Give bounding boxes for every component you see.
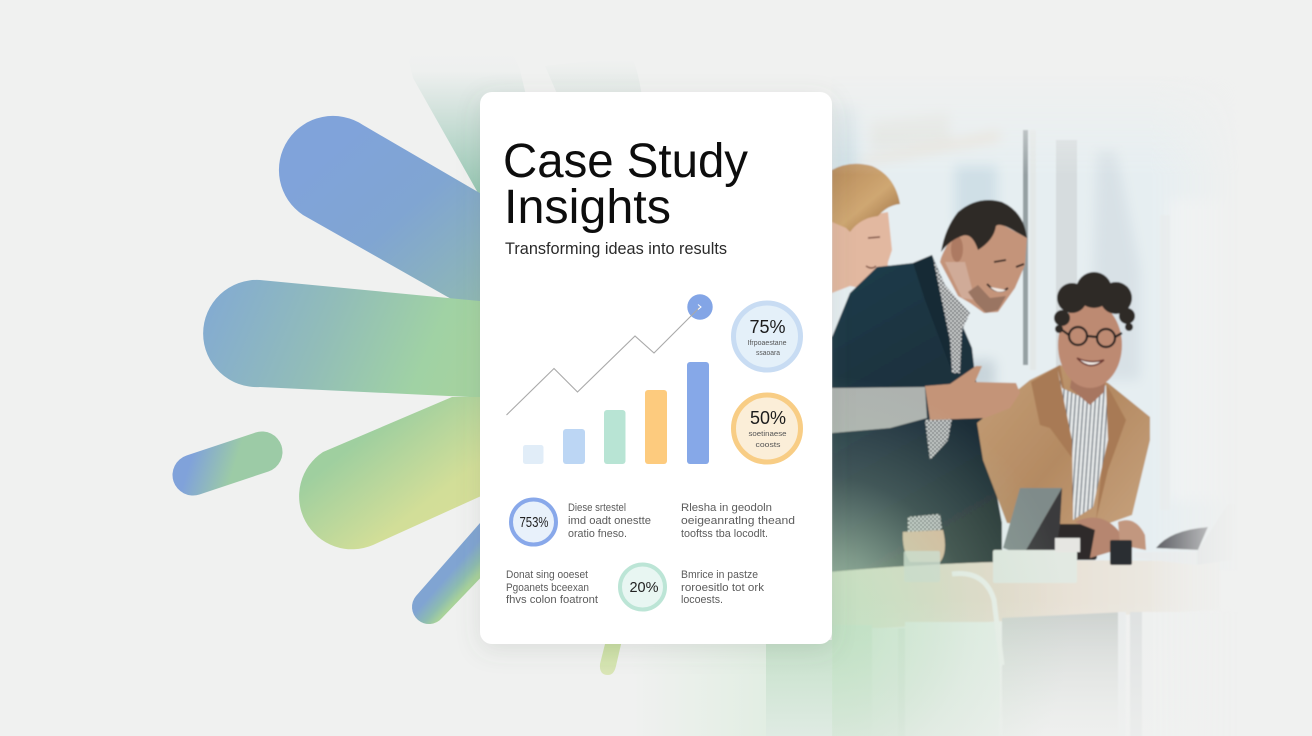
face	[1058, 302, 1122, 388]
text block: bottom left	[506, 569, 598, 606]
chart: rising line and bars	[506, 294, 713, 464]
hair	[941, 200, 1027, 252]
hair	[832, 164, 900, 232]
gesturing hand	[925, 366, 1020, 420]
title: Insights	[504, 181, 671, 234]
text block: bottom right	[681, 569, 765, 606]
subtitle: Transforming ideas into results	[505, 240, 727, 258]
text block: bottom left: fhvs colon foatront	[506, 594, 598, 606]
petal: small capsule	[193, 452, 262, 475]
text block: bottom right: roroesitlo tot ork	[681, 582, 765, 594]
smile	[1077, 358, 1104, 366]
petal: lime	[299, 397, 490, 549]
laptop lid	[1197, 504, 1236, 565]
pale trouser shape below the card	[766, 640, 832, 736]
stat: 50%: soetinaese	[748, 431, 787, 438]
stat: 75%: Ifrpoaestane	[748, 340, 787, 347]
table legs and lower area	[832, 612, 1242, 736]
stat: 50%: coosts	[756, 442, 781, 449]
striped shirt	[1057, 367, 1108, 520]
bars	[523, 362, 709, 464]
tablet shadow	[1023, 488, 1062, 555]
person: left man	[832, 164, 900, 293]
title	[503, 135, 748, 234]
title: Case Study	[503, 135, 748, 188]
laptop base	[1134, 552, 1197, 565]
fist and cuff	[903, 514, 945, 562]
white box	[993, 550, 1077, 583]
jacket lapel	[913, 256, 950, 354]
petal: faint top	[545, 56, 642, 96]
text block: top right: Rlesha in geodoln	[681, 502, 772, 514]
petal: pale top	[409, 46, 560, 240]
card background	[480, 92, 832, 644]
text block: top middle	[568, 502, 651, 540]
text block: top middle: imd oadt onestte	[568, 515, 651, 527]
petal: bottom tip	[600, 640, 622, 675]
marker chevron	[698, 304, 701, 310]
small white block	[1055, 538, 1080, 552]
glass	[904, 551, 940, 582]
window background	[832, 157, 1204, 560]
person: middle man	[832, 200, 1027, 572]
petal: thin lower	[412, 515, 490, 624]
text block: bottom right: locoests.	[681, 594, 723, 606]
green fade over lower left of photo	[832, 375, 1072, 736]
ear	[951, 236, 963, 262]
eye and mouth	[866, 237, 880, 268]
glasses	[1062, 327, 1122, 347]
white fade over lower photo	[832, 600, 1262, 736]
face	[832, 212, 892, 293]
stubble	[968, 285, 1006, 313]
eyes and smile	[987, 260, 1024, 291]
blazer lapel right	[1096, 385, 1126, 520]
stat: 75%: ssaoara	[756, 350, 780, 357]
checked shirt upper	[933, 258, 970, 373]
fan graphic	[193, 46, 642, 675]
pale floor below the card	[630, 620, 766, 736]
blazer lapel left	[1031, 366, 1072, 456]
trend line	[506, 307, 700, 415]
jacket	[832, 255, 1002, 572]
small dark cup	[1110, 540, 1132, 565]
neck	[1070, 380, 1105, 406]
text block: top right	[681, 502, 795, 540]
laptop keyboard	[1156, 527, 1208, 550]
mug	[1057, 524, 1097, 560]
neck highlight	[945, 262, 975, 300]
stat: 753%	[511, 500, 556, 544]
stat: 20%: 20%	[630, 579, 658, 596]
stat: 50%	[734, 395, 800, 462]
text block: top right: tooftss tba locodlt.	[681, 528, 768, 540]
stat: 50%: 50%	[750, 408, 786, 428]
cable	[952, 574, 1002, 665]
stat: 75%: 75%	[749, 317, 786, 337]
blurred window details	[832, 114, 1139, 383]
petal: teal green	[203, 280, 490, 398]
stat: 753%: 753%	[520, 514, 548, 531]
text block: top right: oeigeanratlng theand	[681, 515, 795, 527]
text block: bottom right: Bmrice in pastze	[681, 569, 758, 581]
window mullions	[1023, 130, 1028, 365]
left hand	[1118, 520, 1146, 550]
stat: 75%	[734, 303, 800, 370]
stat: 20%	[620, 564, 665, 610]
checked shirt lower	[925, 418, 952, 460]
hands and mug	[1056, 518, 1208, 566]
photo: three colleagues at a table	[832, 108, 1208, 736]
text block: bottom left: Pgoanets bceexan	[506, 582, 589, 594]
grey sleeve	[832, 387, 927, 433]
person: woman	[977, 272, 1150, 530]
text block: bottom left: Donat sing ooeset	[506, 569, 588, 581]
text block: top middle: oratio fneso.	[568, 528, 627, 540]
blazer	[977, 365, 1150, 530]
panel: case study card	[480, 92, 832, 644]
end marker	[687, 294, 713, 320]
hair	[1054, 272, 1135, 333]
tablet	[1003, 488, 1062, 555]
table	[832, 560, 1180, 628]
neck and face	[940, 222, 1027, 313]
right hand	[1075, 518, 1120, 558]
text block: top middle: Diese srtestel	[568, 502, 626, 514]
petal: blue	[279, 116, 490, 302]
